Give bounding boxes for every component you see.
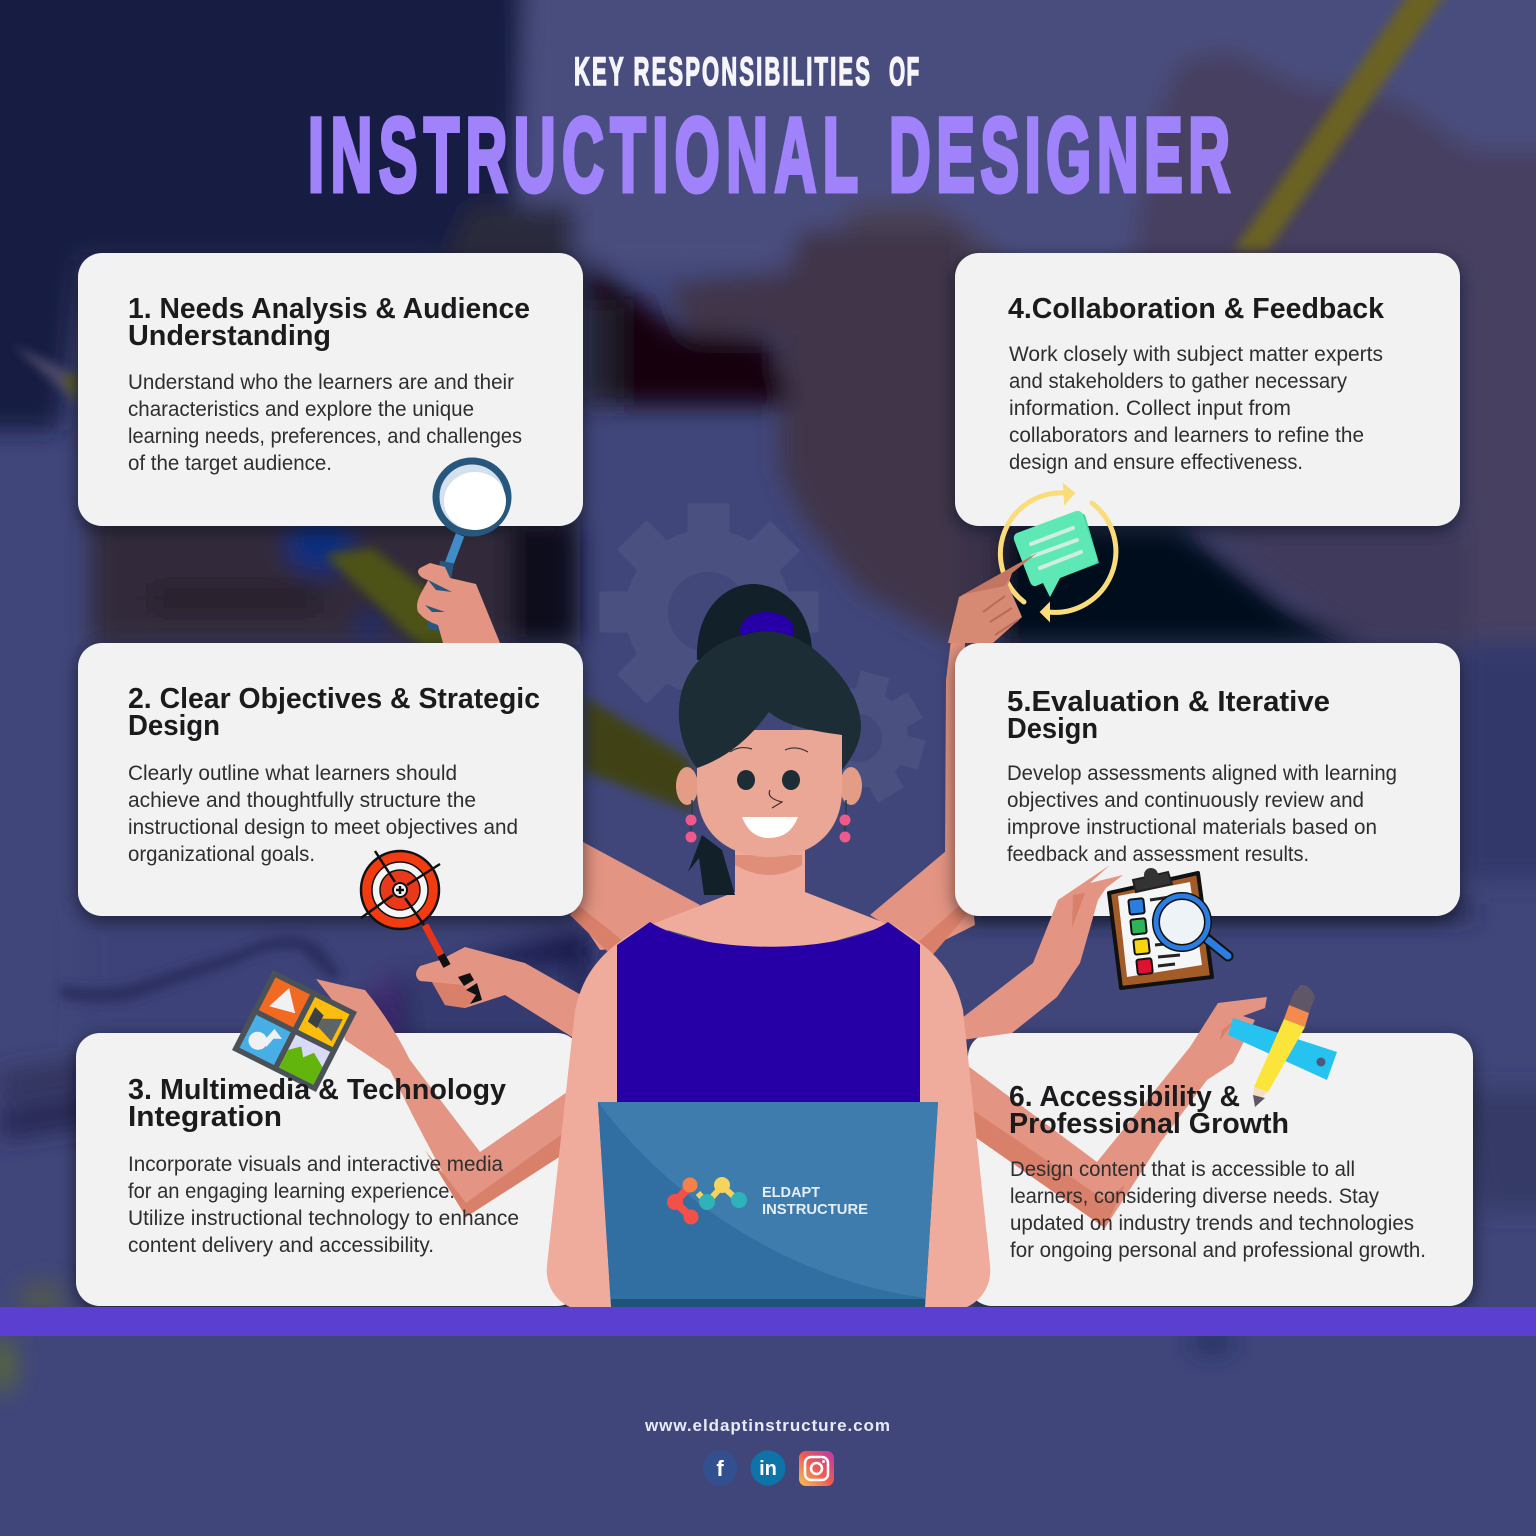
text: card 5: improve instructional materials based on	[1007, 816, 1377, 839]
laptop with logo: ELDAPT	[762, 1184, 820, 1201]
text: card 5: feedback and assessment results.	[1007, 843, 1309, 866]
text: card 3: Incorporate visuals and interactive media	[128, 1153, 503, 1176]
text: card 5: Design	[1007, 713, 1098, 745]
text: card 6	[1009, 1081, 1426, 1262]
panel: card 1	[78, 253, 583, 526]
icon: chat with sync arrows and pointing hand	[948, 485, 1116, 643]
text: card 2: instructional design to meet objectives and	[128, 816, 518, 839]
text: card 3: Integration	[128, 1101, 282, 1133]
text: card 6: 6. Accessibility &	[1009, 1081, 1240, 1113]
panel: card 4	[955, 253, 1460, 526]
icon: clipboard with magnifier	[1109, 868, 1228, 988]
text: card 6: updated on industry trends and technologies	[1010, 1212, 1414, 1235]
text: card 4	[1008, 293, 1385, 474]
text: card 4: 4.Collaboration & Feedback	[1008, 293, 1385, 325]
panel: card 3	[76, 1033, 581, 1306]
text: card 3: Utilize instructional technology to enhance	[128, 1207, 519, 1230]
text: card 1: characteristics and explore the unique	[128, 398, 474, 421]
text: card 2: Design	[128, 710, 220, 742]
text: card 1	[128, 293, 530, 475]
icon: target with dart	[361, 851, 447, 966]
icon: facebook: f	[716, 1456, 724, 1481]
text: card 1: learning needs, preferences, and challenges	[128, 425, 522, 448]
icon: magnifying glass and hand	[417, 461, 508, 643]
text: card 6: Design content that is accessible to all	[1010, 1158, 1355, 1181]
text: card 5	[1007, 686, 1397, 866]
text: card 1: Understand who the learners are and their	[128, 371, 514, 394]
text: card 2: achieve and thoughtfully structure the	[128, 789, 476, 812]
footer: website: www.eldaptinstructure.com	[644, 1416, 890, 1435]
icon: linkedin: in	[759, 1458, 777, 1480]
title: instructional designer: INSTRUCTIONAL	[308, 96, 858, 213]
panel: card 6	[968, 1033, 1473, 1306]
icon: multimedia tiles	[232, 970, 357, 1092]
arm: target hand	[416, 947, 590, 1042]
panel: card 5	[955, 643, 1460, 916]
text: card 4: and stakeholders to gather necessary	[1009, 370, 1347, 393]
text: card 4: information. Collect input from	[1009, 397, 1291, 420]
icon: facebook	[702, 1450, 738, 1486]
arm: multimedia hand	[316, 979, 570, 1217]
text: card 1: 1. Needs Analysis & Audience	[128, 293, 530, 325]
title: instructional designer: DESIGNER	[889, 96, 1230, 213]
text: card 2: 2. Clear Objectives & Strategic	[128, 683, 540, 715]
text: card 3: 3. Multimedia & Technology	[128, 1074, 506, 1106]
text: card 1: of the target audience.	[128, 452, 332, 475]
panel: card 2	[78, 643, 583, 916]
text: card 2: organizational goals.	[128, 843, 315, 866]
back arms behind cards	[570, 640, 975, 958]
text: card 2: Clearly outline what learners should	[128, 762, 457, 785]
text: card 5: Develop assessments aligned with learning	[1007, 762, 1397, 785]
purple bar	[0, 1307, 1536, 1336]
text: card 4: collaborators and learners to refine the	[1009, 424, 1364, 447]
text: card 5: 5.Evaluation & Iterative	[1007, 686, 1330, 718]
text: card 4: Work closely with subject matter experts	[1009, 343, 1383, 366]
laptop with logo: INSTRUCTURE	[762, 1201, 868, 1218]
text: card 3: content delivery and accessibility.	[128, 1234, 434, 1257]
text: card 3: for an engaging learning experience.	[128, 1180, 455, 1203]
icon: linkedin	[750, 1450, 786, 1486]
laptop with logo	[598, 1102, 938, 1307]
text: card 6: Professional Growth	[1009, 1108, 1289, 1140]
text: card 1: Understanding	[128, 320, 331, 352]
title: key responsibilities of: KEY RESPONSIBILITIES	[574, 49, 870, 94]
text: card 6: learners, considering diverse needs. Stay	[1010, 1185, 1379, 1208]
text: card 5: objectives and continuously review and	[1007, 789, 1364, 812]
icon: instagram	[799, 1451, 834, 1486]
icon: ruler and pencil	[1228, 985, 1337, 1107]
title: instructional designer	[308, 96, 1230, 213]
text: card 3	[128, 1074, 519, 1257]
arm: ruler and pencil hand	[960, 997, 1267, 1228]
figure: woman head	[676, 584, 862, 895]
title: key responsibilities of: OF	[889, 49, 919, 94]
text: card 2	[128, 683, 540, 866]
text: card 6: for ongoing personal and professional growth.	[1010, 1239, 1426, 1262]
text: card 4: design and ensure effectiveness.	[1009, 451, 1303, 474]
arm: clipboard hand	[962, 865, 1123, 1040]
background gears	[600, 504, 926, 806]
figure: woman body	[547, 850, 990, 1307]
